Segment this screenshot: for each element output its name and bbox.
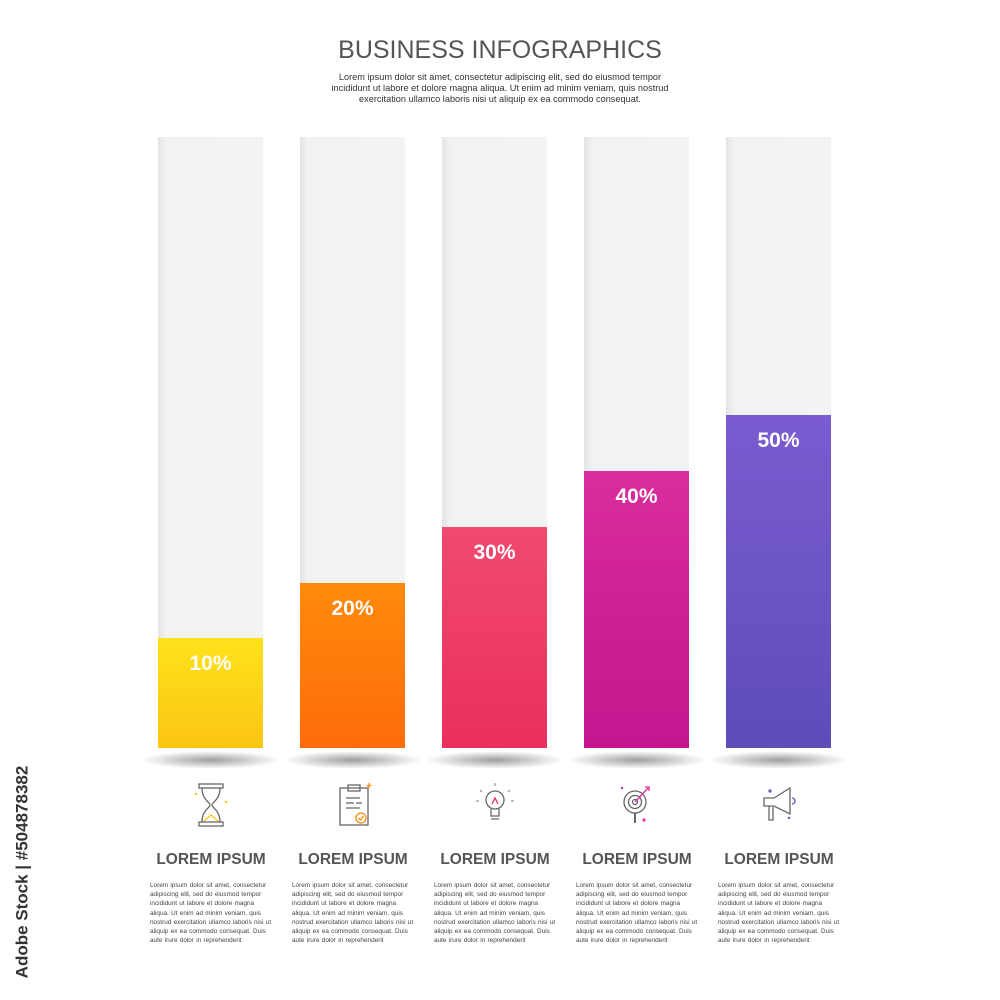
- bar 3: 30%: 30%: [473, 541, 516, 564]
- icon: hourglass: [194, 783, 228, 827]
- bar 4: 40%: 40%: [615, 485, 658, 508]
- bar 4: 40%: [584, 137, 689, 748]
- icon: megaphone: [763, 787, 796, 821]
- column 2 text: Lorem ipsum dolor sit amet, consectetur adipiscing elit, sed do eiusmod tempor incididunt ut labore et dolore magna aliqua. Ut enim ad minim veniam, quis nostrud exercitation ullamco laboris nisi ut aliquip ex ea commodo consequat. Duis aute irure dolor in reprehenderit: [292, 882, 413, 944]
- icon: clipboard: [339, 783, 372, 826]
- bar 5: 50%: [726, 137, 831, 748]
- subtitle text: Lorem ipsum dolor sit amet, consectetur adipiscing elit, sed do eiusmod tempor incididunt ut labore et dolore magna aliqua. Ut enim ad minim veniam, quis nostrud exercitation ullamco laboris nisi ut aliquip ex ea commodo consequat.: [331, 72, 669, 104]
- bar 1: 10%: 10%: [189, 652, 232, 675]
- column 4 heading: LOREM IPSUM: [582, 851, 692, 868]
- bar 3: 30%: [442, 137, 547, 748]
- column 4 text: Lorem ipsum dolor sit amet, consectetur adipiscing elit, sed do eiusmod tempor incididunt ut labore et dolore magna aliqua. Ut enim ad minim veniam, quis nostrud exercitation ullamco laboris nisi ut aliquip ex ea commodo consequat. Duis aute irure dolor in reprehenderit: [576, 882, 697, 944]
- bar 2: 20%: 20%: [331, 597, 374, 620]
- column 1 heading: LOREM IPSUM: [156, 851, 266, 868]
- title: BUSINESS INFOGRAPHICS: [338, 36, 662, 64]
- bar 2: 20%: [300, 137, 405, 748]
- icon: lightbulb: [476, 783, 514, 820]
- bar 1: 10%: [158, 137, 263, 748]
- column 5 text: Lorem ipsum dolor sit amet, consectetur adipiscing elit, sed do eiusmod tempor incididunt ut labore et dolore magna aliqua. Ut enim ad minim veniam, quis nostrud exercitation ullamco laboris nisi ut aliquip ex ea commodo consequat. Duis aute irure dolor in reprehenderit: [718, 882, 839, 944]
- column 2 heading: LOREM IPSUM: [298, 851, 408, 868]
- column 3 heading: LOREM IPSUM: [440, 851, 550, 868]
- column 3 text: Lorem ipsum dolor sit amet, consectetur adipiscing elit, sed do eiusmod tempor incididunt ut labore et dolore magna aliqua. Ut enim ad minim veniam, quis nostrud exercitation ullamco laboris nisi ut aliquip ex ea commodo consequat. Duis aute irure dolor in reprehenderit: [434, 882, 555, 944]
- bar 5: 50%: 50%: [757, 429, 800, 452]
- icon: target: [620, 786, 650, 823]
- column 5 heading: LOREM IPSUM: [724, 851, 834, 868]
- column 1 text: Lorem ipsum dolor sit amet, consectetur adipiscing elit, sed do eiusmod tempor incididunt ut labore et dolore magna aliqua. Ut enim ad minim veniam, quis nostrud exercitation ullamco laboris nisi ut aliquip ex ea commodo consequat. Duis aute irure dolor in reprehenderit: [150, 882, 271, 944]
- watermark id: Adobe Stock | #504878382: [12, 766, 32, 978]
